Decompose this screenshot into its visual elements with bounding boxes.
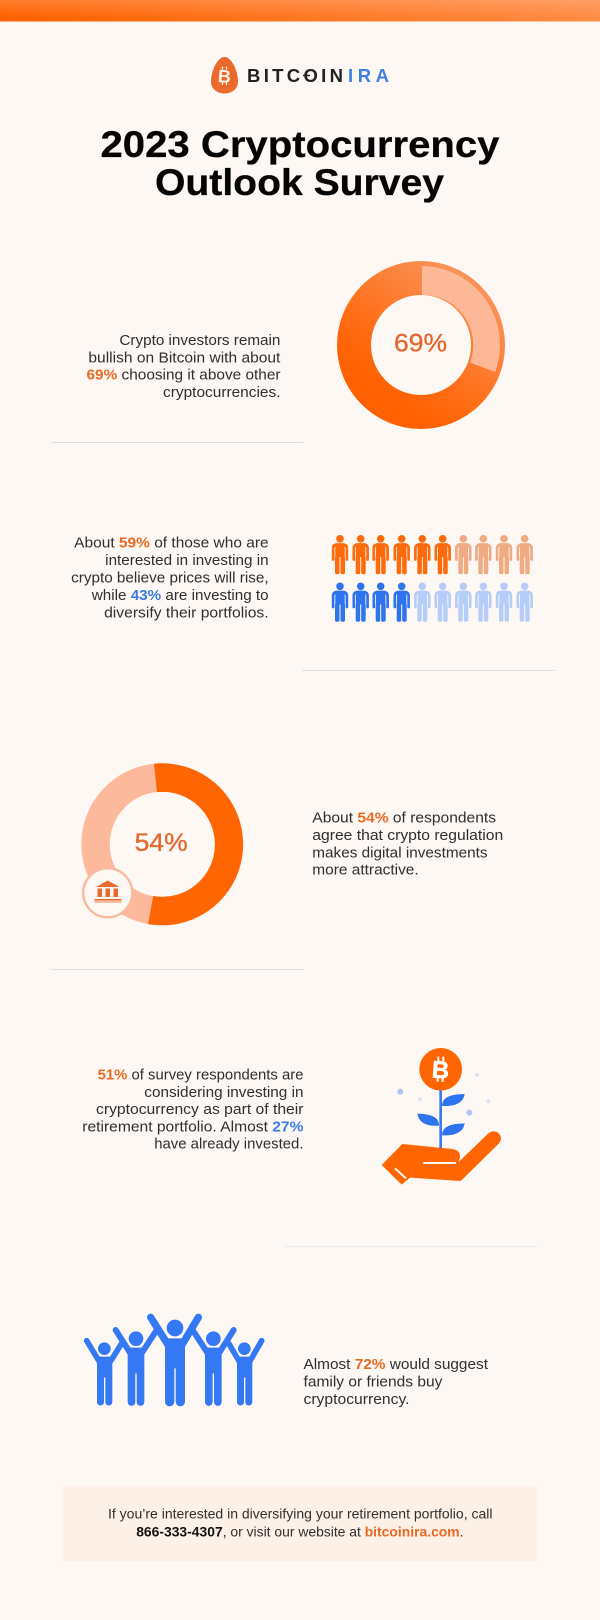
text block: prices will rise: crypto believe prices will rise, [71, 569, 269, 586]
text block: prices will rise: diversify their portfolios. [104, 604, 269, 621]
text block: bullish on Bitcoin [86, 332, 281, 401]
text block: prices will rise: while 43% are investing to [91, 587, 269, 604]
text block: retirement portfolio: 51% of survey respondents are [98, 1066, 303, 1083]
person 5 [229, 1341, 262, 1405]
text block: suggest to family: cryptocurrency. [304, 1391, 410, 1408]
panel: recommendation [87, 1317, 489, 1408]
person 2 [116, 1330, 156, 1406]
text block: bullish on Bitcoin: Crypto investors remain [119, 332, 280, 349]
panel: regulation [83, 763, 503, 925]
pictogram: blue people row, 43% [333, 582, 532, 622]
person 1 [87, 1341, 122, 1405]
text block: bullish on Bitcoin: bullish on Bitcoin with about [88, 349, 281, 366]
text block: regulation: agree that crypto regulation [312, 827, 503, 844]
panel: price expectations [71, 535, 532, 622]
title [100, 123, 500, 203]
text block: prices will rise: About 59% of those who are [74, 535, 269, 552]
text block: suggest to family: family or friends buy [304, 1373, 443, 1390]
text block: retirement portfolio: have already invested. [154, 1136, 304, 1153]
hand [382, 1131, 501, 1185]
person 3, centre [151, 1317, 198, 1406]
text block: bullish on Bitcoin: cryptocurrencies. [163, 384, 280, 401]
title: 2023 Cryptocurrency [100, 123, 500, 165]
bitcoin coin: B [431, 1056, 450, 1085]
donut chart: 69% [354, 266, 500, 412]
text block: retirement portfolio: retirement portfolio. Almost 27% [82, 1118, 304, 1135]
logo: Bitcoin IRA [211, 57, 389, 94]
text block: retirement portfolio: considering investing in [144, 1084, 304, 1101]
text block: bullish on Bitcoin: 69% choosing it above other [86, 367, 280, 384]
panel: retirement [82, 1048, 501, 1185]
logo wordmark: IRA [348, 65, 389, 86]
floating dots [397, 1073, 490, 1116]
text block: retirement portfolio: cryptocurrency as part of their [96, 1101, 304, 1118]
icon: orange egg with bitcoin sign: B [217, 66, 232, 87]
donut chart: 54% [83, 763, 243, 925]
top gradient bar [0, 0, 600, 22]
text block: retirement portfolio [82, 1066, 304, 1153]
callout text: 866-333-4307, or visit our website at bitcoinira.com. [136, 1524, 463, 1540]
logo wordmark [247, 65, 389, 86]
callout text: If you’re interested in diversifying your retirement portfolio, call [108, 1506, 492, 1522]
donut chart: 69%: 69% [394, 330, 447, 358]
person 4 [193, 1330, 234, 1406]
title: Outlook Survey [155, 161, 444, 203]
callout text [108, 1506, 492, 1540]
donut chart: 54%: 54% [135, 829, 188, 857]
text block: regulation [312, 809, 503, 879]
icon: hand holding bitcoin plant [382, 1048, 501, 1185]
plant stem and leaves [417, 1087, 465, 1150]
text block: suggest to family [304, 1356, 489, 1408]
text block: regulation: more attractive. [312, 862, 419, 879]
logo wordmark: BITCOIN [247, 65, 343, 86]
panel: bitcoin preference [86, 266, 500, 412]
text block: prices will rise [71, 535, 269, 621]
pictogram: orange people row, 59% [333, 535, 532, 574]
icon: bank in circle [83, 868, 132, 917]
text block: suggest to family: Almost 72% would suggest [304, 1356, 489, 1373]
icon: orange egg with bitcoin sign [211, 57, 238, 94]
text block: regulation: About 54% of respondents [312, 809, 496, 826]
text block: regulation: makes digital investments [312, 844, 488, 861]
callout: contact box [63, 1486, 537, 1561]
text block: prices will rise: interested in investing in [105, 552, 269, 569]
icon: group of five people with raised arms [87, 1317, 262, 1406]
